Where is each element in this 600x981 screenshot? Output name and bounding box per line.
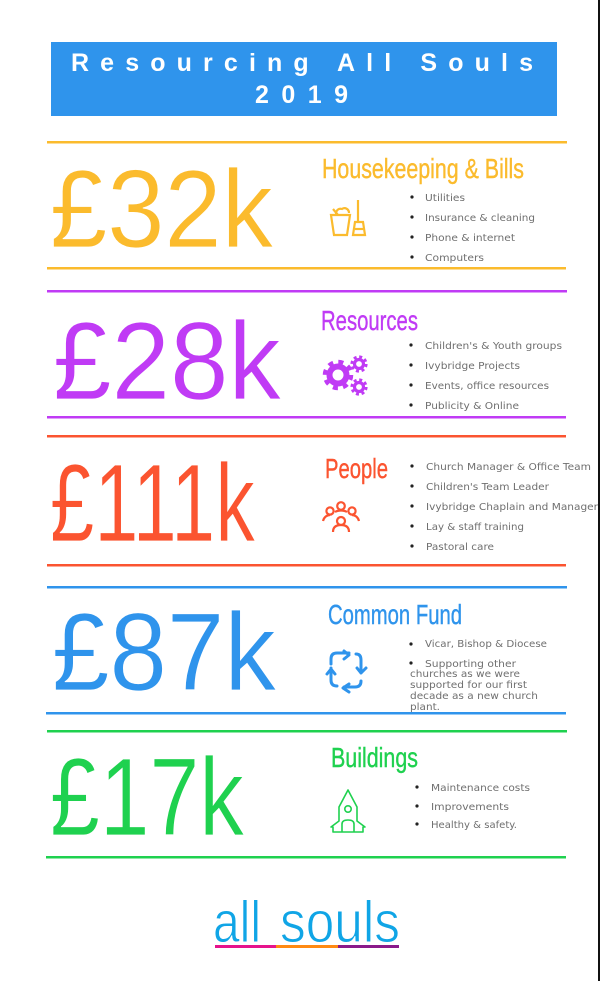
list: housekeeping items: Insurance & cleaning	[425, 213, 535, 224]
heading: common fund: Common Fund	[328, 599, 462, 630]
amount: 87k: £87k	[52, 591, 277, 714]
panel: housekeeping and bills	[47, 141, 567, 271]
list: housekeeping items: Phone & internet	[425, 233, 515, 244]
list: buildings items: Healthy & safety.	[431, 820, 517, 831]
list: people items: Lay & staff training	[426, 522, 524, 533]
heading: resources: Resources	[321, 305, 418, 336]
list: buildings items: Maintenance costs	[431, 783, 530, 794]
list: common fund items: Vicar, Bishop & Diocese	[425, 639, 547, 650]
logo: all souls	[213, 890, 400, 955]
icon: cycling arrows	[327, 651, 366, 692]
list: common fund items: decade as a new church	[410, 691, 538, 702]
title banner	[51, 42, 557, 116]
logo: all souls: all	[213, 890, 261, 955]
list: people items: Church Manager & Office Team	[426, 462, 591, 473]
list: buildings items	[415, 783, 530, 831]
list: people items: Ivybridge Chaplain and Manager	[426, 502, 599, 513]
list: people items: Children's Team Leader	[426, 482, 550, 493]
amount: 32k: £32k	[50, 148, 274, 271]
icon: gears	[325, 357, 366, 394]
panel: common fund	[46, 586, 567, 714]
panel: people	[47, 435, 599, 566]
amount: 28k: £28k	[53, 300, 282, 423]
icon: cleaning bucket and broom	[331, 200, 365, 235]
list: common fund items: supported for our first	[410, 680, 527, 691]
heading: housekeeping and bills: Housekeeping & Bills	[322, 153, 524, 184]
panel: resources	[47, 290, 567, 423]
list: people items	[410, 462, 599, 553]
title banner: 2019	[255, 81, 348, 109]
list: resources items: Publicity & Online	[425, 401, 519, 412]
icon: group of people	[323, 502, 359, 532]
list: resources items: Children's & Youth groups	[425, 341, 562, 352]
heading: people: People	[325, 453, 388, 484]
list: common fund items: Supporting other	[425, 659, 517, 670]
title banner: Resourcing All Souls	[71, 49, 533, 77]
list: buildings items: Improvements	[431, 802, 509, 813]
icon: church	[331, 790, 365, 832]
list: resources items: Ivybridge Projects	[425, 361, 520, 372]
list: housekeeping items: Computers	[425, 253, 484, 264]
list: common fund items	[409, 639, 547, 713]
list: people items: Pastoral care	[426, 542, 494, 553]
heading: buildings: Buildings	[331, 742, 418, 773]
panel: buildings	[46, 730, 567, 859]
list: common fund items: plant.	[410, 702, 440, 713]
list: common fund items: churches as we were	[410, 669, 520, 680]
list: resources items	[409, 341, 562, 412]
list: housekeeping items	[410, 193, 535, 264]
logo: all souls: souls	[280, 890, 400, 955]
list: housekeeping items: Utilities	[425, 193, 465, 204]
list: resources items: Events, office resources	[425, 381, 549, 392]
amount: 111k: £111k	[50, 442, 256, 565]
amount: 17k: £17k	[50, 736, 245, 859]
